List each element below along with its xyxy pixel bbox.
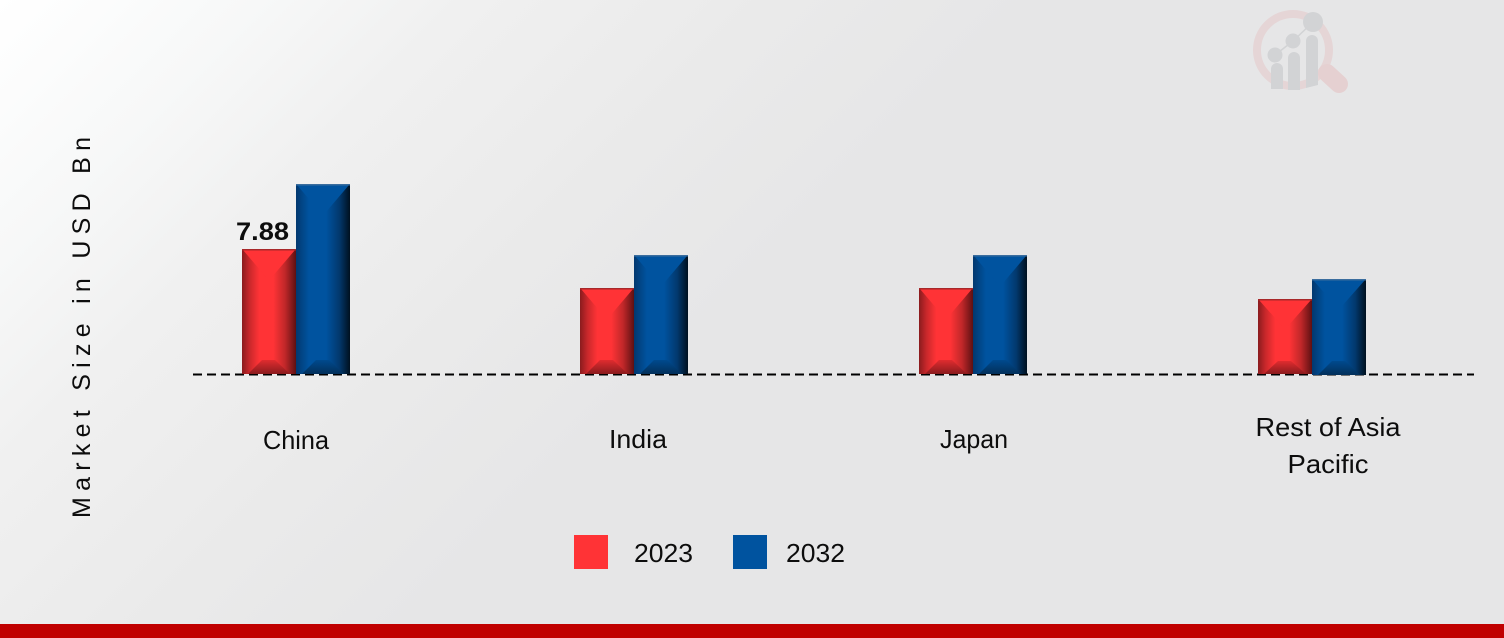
bar: China 2023 — [242, 249, 296, 374]
bar chart — [242, 184, 1366, 375]
label: Rest of Asia Pacific: Rest of Asia — [1256, 412, 1401, 442]
icon: rising bars and dots — [1268, 12, 1323, 90]
bar: China 2032 — [296, 184, 350, 374]
label: Japan: Japan — [940, 424, 1008, 454]
legend — [574, 535, 845, 569]
bar: Japan 2032 — [973, 255, 1027, 374]
bar: Japan 2023 — [919, 288, 973, 374]
bar: India 2032 — [634, 255, 688, 374]
bar: Rest of Asia Pacific 2023 — [1258, 299, 1312, 374]
bar: India 2023 — [580, 288, 634, 374]
y-axis title: Market Size in USD Bn — [68, 137, 96, 518]
legend swatch 2032 — [733, 535, 767, 569]
label: Rest of Asia Pacific — [1256, 412, 1401, 479]
legend swatch 2023 — [574, 535, 608, 569]
label: China: China — [263, 425, 330, 455]
category labels — [263, 412, 1401, 479]
footer bar — [0, 624, 1504, 638]
icon: magnifier ring and handle — [1257, 14, 1339, 86]
legend label 2023: 2023 — [634, 538, 693, 568]
label: India: India — [609, 424, 668, 454]
value label: 7.88 — [236, 218, 289, 246]
label: Rest of Asia Pacific: Pacific — [1288, 449, 1368, 479]
baseline — [193, 374, 1474, 376]
bar: Rest of Asia Pacific 2032 — [1312, 279, 1366, 375]
legend label 2032: 2032 — [786, 538, 845, 568]
watermark logo — [1257, 12, 1339, 90]
